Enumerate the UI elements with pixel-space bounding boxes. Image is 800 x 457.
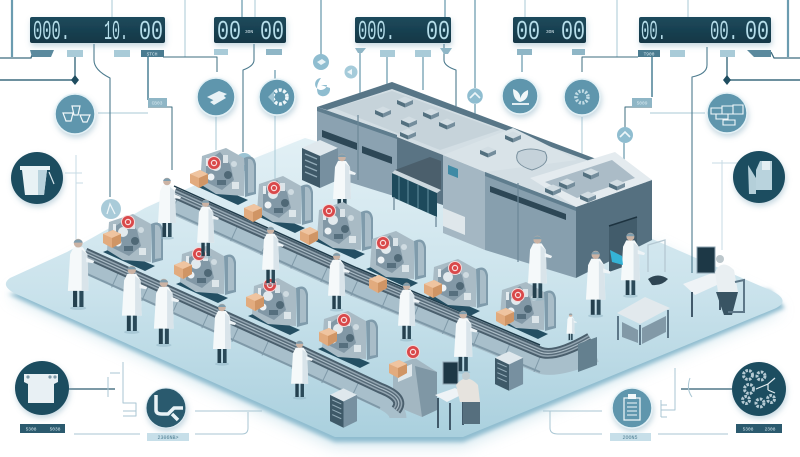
icon: counter unit xyxy=(15,361,69,415)
front kiosks xyxy=(330,351,523,428)
display 4 xyxy=(513,17,586,48)
display 1: 10. xyxy=(104,18,128,48)
icon: clipboard xyxy=(612,388,652,428)
display 2: 3ON xyxy=(245,29,253,35)
display 1: 00 xyxy=(139,18,163,48)
bottom labels: 2306NB> xyxy=(157,435,179,441)
small display labels: 5009 xyxy=(637,100,648,106)
small display labels xyxy=(30,48,771,107)
workers xyxy=(68,178,645,399)
icon: gears cluster xyxy=(732,362,786,416)
display 2: 00 xyxy=(217,18,241,48)
floor shadow xyxy=(10,150,782,446)
bottom labels: 5038 xyxy=(50,426,61,432)
display 2 xyxy=(214,17,286,48)
small round markers xyxy=(101,54,633,219)
small display labels: T900 xyxy=(644,52,655,58)
right workstation table xyxy=(617,240,670,345)
diamond markers xyxy=(71,75,731,85)
worker near building xyxy=(333,154,356,216)
bottom labels: 2OON5 xyxy=(622,435,638,441)
display 5: 00. xyxy=(641,18,666,48)
icon: tall shape xyxy=(733,151,785,203)
bottom labels: 5308 xyxy=(26,426,37,432)
display 2: 00 xyxy=(260,18,284,48)
machines on top line xyxy=(190,148,556,339)
display 3: 00 xyxy=(426,18,450,48)
display 5: 00. xyxy=(710,18,738,48)
display 4: 00 xyxy=(561,18,585,48)
kiosk by building xyxy=(302,140,338,188)
icon: gear xyxy=(564,79,600,115)
factory floor platform xyxy=(6,138,785,442)
icon: floor plan xyxy=(707,93,747,133)
icon: stacked slabs xyxy=(197,78,235,116)
display 1 xyxy=(30,17,165,48)
seated operator desk front xyxy=(435,362,480,430)
icon: pipe xyxy=(146,388,186,428)
display 3: 000. xyxy=(358,18,395,48)
machines on bottom line xyxy=(103,214,420,378)
bottom conveyor line xyxy=(85,253,399,418)
cyan clipboard xyxy=(610,250,623,265)
icon: bucket xyxy=(11,152,63,204)
display 3 xyxy=(355,17,451,48)
display 4: 00 xyxy=(516,18,540,48)
top conveyor line xyxy=(174,186,597,372)
display 5: 00 xyxy=(745,18,769,48)
icon: leaf xyxy=(502,78,538,114)
small display labels: CB03 xyxy=(152,100,163,106)
seated operator desk right xyxy=(683,247,744,317)
bottom labels: 5308 xyxy=(743,426,754,432)
icon: gear tilted xyxy=(259,79,295,115)
bottom labels xyxy=(20,424,782,441)
display 5 xyxy=(639,17,771,48)
factory building xyxy=(317,82,652,278)
icon: bowls xyxy=(55,94,95,134)
grey cabinet machine xyxy=(393,358,437,417)
display 4: 3ON xyxy=(546,29,554,35)
bottom labels: 2308 xyxy=(765,426,776,432)
display 1: 000. xyxy=(33,18,70,48)
small display labels: STCH xyxy=(147,52,158,58)
